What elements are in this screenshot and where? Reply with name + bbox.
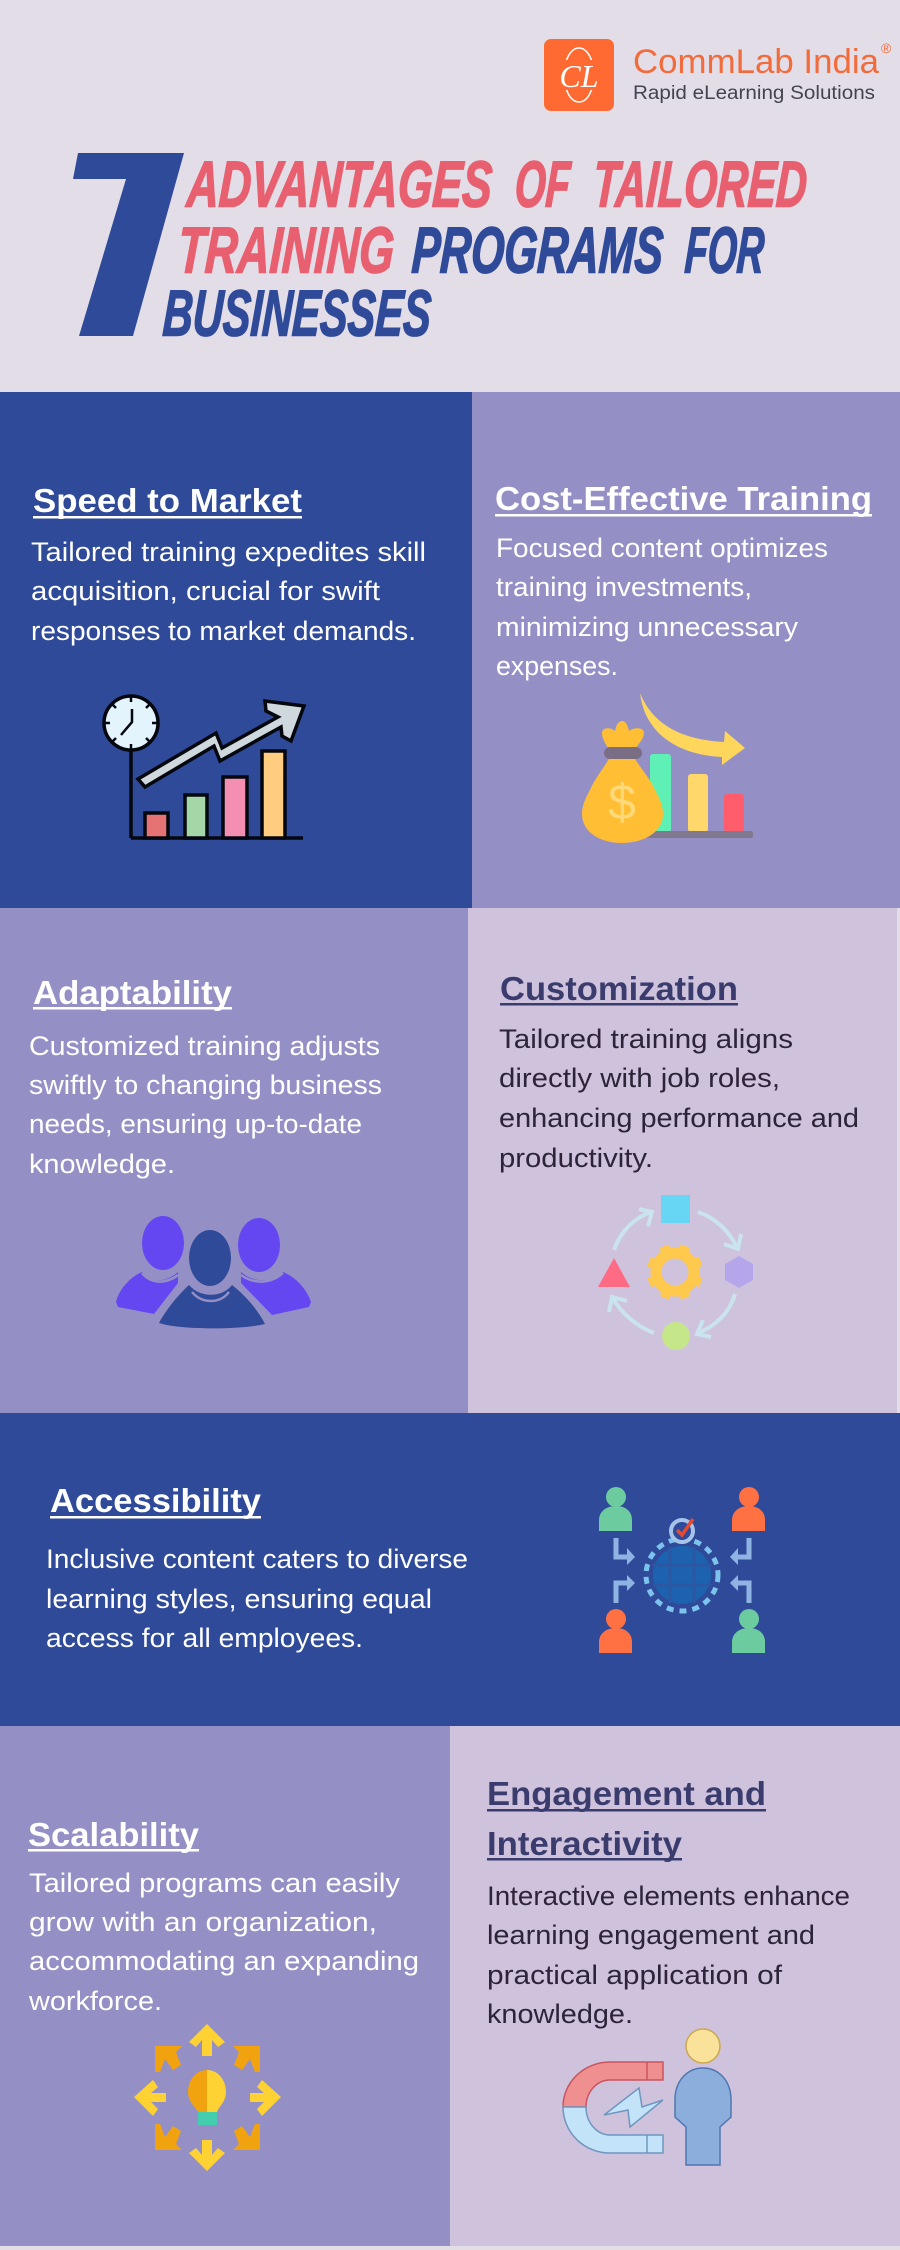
body text: grow with an organization, [29, 1907, 377, 1937]
title line 1: ADVANTAGES [184, 148, 494, 220]
heading: Scalability [28, 1817, 199, 1854]
body text: productivity. [499, 1143, 653, 1173]
icon: light bulb with arrows [134, 2024, 281, 2171]
icon: people around globe [599, 1487, 765, 1653]
body text: needs, ensuring up-to-date [29, 1109, 362, 1139]
heading: Engagement and [487, 1776, 766, 1813]
heading [487, 1776, 766, 1863]
body text: Tailored programs can easily [29, 1868, 401, 1898]
body text: practical application of [487, 1960, 783, 1990]
body text: acquisition, crucial for swift [31, 576, 381, 606]
panel: engagement and interactivity [450, 1726, 900, 2246]
body text: minimizing unnecessary [496, 612, 799, 642]
body text: learning engagement and [487, 1920, 815, 1950]
icon: magnet attracting person [563, 2029, 731, 2165]
numeral 7 [73, 153, 184, 336]
panel background [0, 908, 468, 1413]
panel: accessibility [0, 1413, 900, 1726]
body text: enhancing performance and [499, 1103, 859, 1133]
body text: directly with job roles, [499, 1063, 780, 1093]
logo tagline: Rapid eLearning Solutions [633, 83, 875, 104]
heading: Interactivity [487, 1826, 682, 1863]
body text: training investments, [496, 572, 752, 602]
body text: Tailored training expedites skill [31, 537, 426, 567]
title line 1: OF [513, 148, 573, 220]
body text: knowledge. [29, 1149, 175, 1179]
registered mark: ® [881, 40, 892, 56]
icon: group of people [116, 1216, 311, 1328]
icon: clock and growth chart [104, 696, 304, 838]
logo mark [544, 39, 614, 111]
body text: Inclusive content caters to diverse [46, 1544, 468, 1574]
panel: customization [468, 908, 897, 1413]
heading: Cost-Effective Training [495, 481, 872, 518]
panel background [0, 392, 472, 908]
panel: speed to market [0, 392, 472, 908]
body text: Customized training adjusts [29, 1031, 380, 1061]
body text: accommodating an expanding [29, 1946, 419, 1976]
heading: Speed to Market [33, 483, 302, 520]
body text: Interactive elements enhance [487, 1881, 850, 1911]
panel: scalability [0, 1726, 450, 2246]
body text: knowledge. [487, 1999, 633, 2029]
title line 2 pink: TRAINING [176, 214, 396, 286]
logo mark: CL [559, 58, 599, 94]
panel: cost-effective training [472, 392, 900, 908]
panel background [0, 1413, 900, 1726]
panel background [472, 392, 900, 908]
title [161, 148, 809, 349]
title line 3: BUSINESSES [161, 277, 433, 349]
body text [29, 1031, 382, 1179]
icon: money bag and falling costs [582, 693, 753, 843]
body text: swiftly to changing business [29, 1070, 382, 1100]
heading: Adaptability [33, 975, 232, 1012]
body text [496, 533, 828, 681]
title line 2 blue: FOR [683, 214, 766, 286]
body text: learning styles, ensuring equal [46, 1584, 432, 1614]
panel background [468, 908, 897, 1413]
icon: money bag and falling costs: $ [608, 774, 636, 830]
icon: shapes cycle with gear [598, 1195, 753, 1350]
logo: CommLab India [544, 39, 892, 111]
body text [46, 1544, 468, 1653]
body text [28, 1868, 419, 2016]
body text: expenses. [496, 651, 618, 681]
panel: adaptability [0, 908, 468, 1413]
logo name: CommLab India [633, 43, 879, 81]
title line 2 blue: PROGRAMS [410, 214, 665, 286]
body text: Focused content optimizes [496, 533, 828, 563]
body text: access for all employees. [46, 1623, 363, 1653]
body text: responses to market demands. [31, 616, 416, 646]
panel background [0, 1726, 450, 2246]
panel background [450, 1726, 900, 2246]
heading: Accessibility [50, 1483, 261, 1520]
body text: Tailored training aligns [499, 1024, 793, 1054]
body text [499, 1024, 859, 1173]
body text: workforce. [28, 1986, 162, 2016]
heading: Customization [500, 971, 738, 1008]
body text [487, 1881, 850, 2029]
body text [31, 537, 426, 646]
